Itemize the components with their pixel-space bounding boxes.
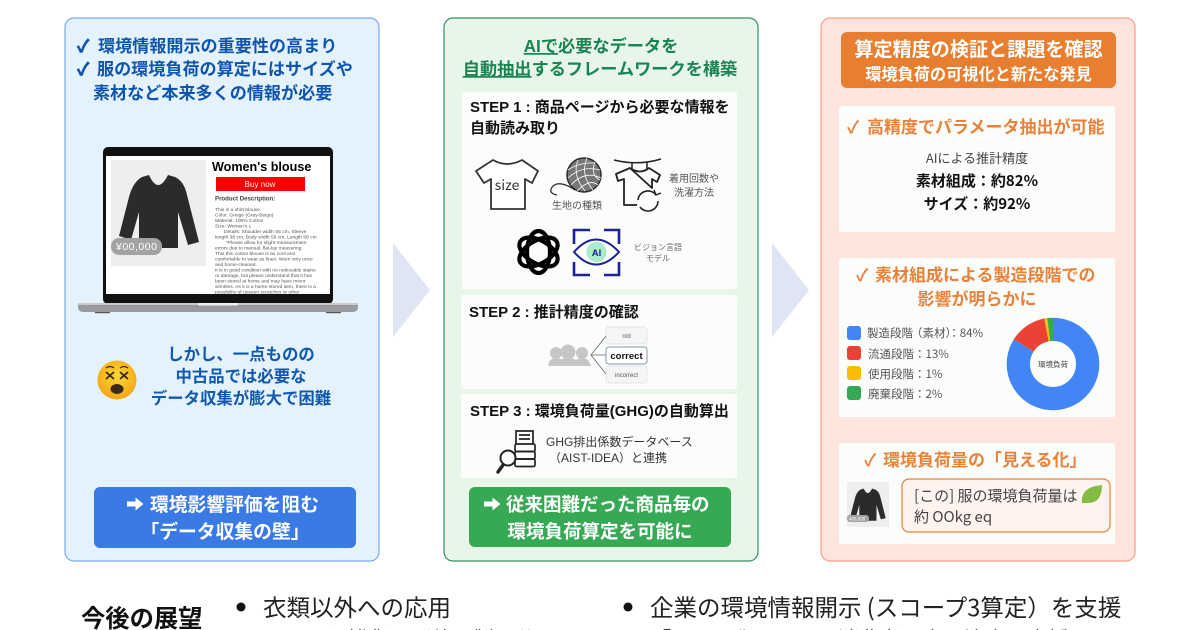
laptop with product page [78, 147, 358, 313]
text: difficulty of data collection: 中古品では必要な [175, 368, 307, 386]
laptop with product page: been stored at home and may have minor [215, 278, 306, 284]
diagram: annotators to labels: incorrect [615, 373, 638, 379]
text: GHG database [546, 434, 693, 465]
icon: vision AI eye: AI [592, 248, 601, 259]
heading: accuracy validation [841, 32, 1116, 88]
panel: lifecycle stage impact: 素材組成による製造段階での [875, 261, 1096, 286]
panel: step 2: STEP 2 : 推計精度の確認 [469, 303, 639, 321]
panel: step 1: STEP 1 : 商品ページから必要な情報を [470, 98, 729, 116]
label: wear count and washing: 着用回数や [669, 172, 719, 185]
arrow: to results panel [772, 243, 809, 337]
icon: database search [498, 431, 535, 472]
heading: importance of environmental disclosure: ✓ [77, 37, 90, 56]
laptop with product page: Details: Shoulder width 55 cm, Sleeve [224, 229, 307, 235]
callout: data collection wall: 環境影響評価を阻む [150, 494, 319, 515]
heading: importance of environmental disclosure [77, 36, 353, 103]
legend: 廃棄段階：2% [868, 386, 943, 402]
panel: extraction accuracy: ✓ [847, 113, 860, 138]
laptop with product page: or damage, but please understand that it has [215, 273, 313, 279]
panel: extraction accuracy: サイズ：約92% [924, 193, 1030, 214]
icon: t-shirt size [476, 160, 538, 209]
callout: product-level calculation: 従来困難だった商品毎の [506, 494, 710, 515]
laptop with product page: Color: Greige (Gray-Beige) [215, 212, 274, 218]
callout: product-level calculation: 環境負荷算定を可能に [507, 521, 693, 542]
panel: step 3 [461, 394, 737, 478]
panel: visualization: 環境負荷量の「見える化」 [883, 446, 1086, 471]
laptop with product page: It is in good condition with no noticeable stains [215, 268, 316, 274]
heading: importance of environmental disclosure: 素材など本来多くの情報が必要 [93, 83, 332, 103]
icon: leaf [1082, 485, 1102, 503]
text: difficulty of data collection: しかし、一点ものの [167, 345, 315, 364]
legend: 流通段階：13% [868, 346, 949, 362]
laptop with product page: possibility of unseen scratches or other [215, 290, 300, 296]
heading: accuracy validation: 環境負荷の可視化と新たな発見 [865, 61, 1092, 85]
text: difficulty of data collection [151, 345, 331, 408]
laptop with product page: This thin cotton blouse is as cool and [215, 251, 295, 257]
panel: extraction accuracy: 高精度でパラメータ抽出が可能 [867, 113, 1104, 138]
panel: background problem [65, 18, 379, 561]
laptop with product page: errors due to manual, flat-lay measuring. [215, 246, 303, 252]
label: vision language model: モデル [646, 253, 670, 263]
icon: OpenAI logo [515, 231, 562, 273]
icon: t-shirt size: size [495, 175, 520, 195]
panel: validation results [821, 18, 1135, 561]
legend: 使用段階：1% [868, 366, 943, 382]
callout: data collection wall [94, 487, 356, 548]
laptop with product page: and home-cleaned. [215, 262, 257, 268]
text: difficulty of data collection: データ収集が膨大で困難 [151, 389, 331, 408]
laptop with product page: Material: 100% Cotton [215, 218, 264, 224]
laptop with product page: Buy now [245, 180, 276, 189]
donut label: 環境負荷 [1038, 359, 1068, 370]
heading: importance of environmental disclosure: ✓ [77, 60, 90, 79]
panel: extraction accuracy: AIによる推計精度 [926, 148, 1028, 167]
diagram: annotators to labels: correct [610, 351, 643, 362]
text: GHG database: GHG排出係数データベース [546, 434, 693, 449]
panel: extraction accuracy: 素材組成：約82% [916, 170, 1038, 191]
laptop with product page: length 38 cm, Body width 58 cm, Length 68 cm [215, 234, 317, 240]
label: wear count and washing: 洗濯方法 [674, 186, 714, 199]
laptop with product page: Size: Women's L [215, 224, 252, 230]
callout: product-level calculation [469, 487, 731, 547]
panel: AI framework [444, 18, 758, 561]
callout: footprint result [902, 479, 1110, 532]
panel: lifecycle stage impact: 影響が明らかに [918, 285, 1036, 310]
laptop with product page: *Please allow for slight measurement [226, 240, 307, 246]
label: wear count and washing [669, 172, 719, 199]
callout: footprint result: 約 OOkg eq [914, 506, 992, 527]
list: future item right: 企業の環境情報開示 (スコープ3算定）を支援 [650, 589, 1121, 623]
laptop with product page: This is a shirt-blouse. [215, 207, 261, 213]
list: future item left [236, 589, 641, 630]
callout: footprint result: [この] 服の環境負荷量は [914, 485, 1078, 506]
panel: step 1: 自動読み取り [470, 119, 560, 137]
diagram: annotators to labels: n/d [622, 334, 631, 340]
heading: importance of environmental disclosure: 服の環境負荷の算定にはサイズや [97, 59, 353, 79]
icon: shirt with washing cycle [614, 159, 661, 211]
panel: visualization [839, 443, 1115, 544]
panel: lifecycle stage impact: ✓ [856, 261, 869, 286]
icon: dizzy face [98, 360, 136, 400]
heading: accuracy validation: 算定精度の検証と課題を確認 [854, 34, 1103, 62]
panel: visualization: ✓ [864, 446, 877, 471]
list: future item left: 衣類以外への応用 [263, 589, 451, 623]
heading: automatic extraction framework: AIで必要なデータを [524, 36, 678, 56]
heading: automatic extraction framework: 自動抽出するフレームワークを構築 [463, 59, 737, 79]
laptop with product page: comfortable to wear as linen. Worn only once [215, 256, 313, 262]
panel: step 1 [462, 92, 737, 289]
heading: automatic extraction framework [463, 36, 737, 79]
panel: step 3: STEP 3 : 環境負荷量(GHG)の自動算出 [470, 402, 729, 420]
product thumbnail: ¥00,000 [849, 516, 866, 522]
diagram: annotators to labels [548, 327, 647, 383]
product thumbnail [847, 482, 889, 527]
callout: data collection wall: 「データ収集の壁」 [140, 520, 310, 542]
heading: importance of environmental disclosure: 環境情報開示の重要性の高まり [98, 36, 337, 56]
icon: yarn ball [551, 158, 602, 212]
laptop with product page: Product Description: [215, 196, 275, 202]
panel: lifecycle stage impact [839, 258, 1115, 417]
arrow: to framework panel [393, 243, 430, 337]
laptop with product page: ¥00,000 [115, 241, 157, 253]
icon: vision AI eye [574, 230, 619, 275]
legend: 製造段階（素材）：84% [867, 325, 984, 341]
label: vision language model: ビジョン言語 [634, 243, 682, 252]
laptop with product page: Women's blouse [212, 160, 311, 174]
text: GHG database: （AIST-IDEA）と連携 [549, 450, 667, 465]
laptop with product page: wrinkles. As it is a home-stored item, there is a [215, 284, 316, 290]
donut chart [1018, 329, 1088, 399]
legend [847, 325, 984, 402]
label: vision language model [634, 243, 682, 263]
panel: step 2 [461, 295, 737, 389]
panel: extraction accuracy [839, 106, 1115, 232]
icon: yarn ball: 生地の種類 [552, 199, 602, 212]
